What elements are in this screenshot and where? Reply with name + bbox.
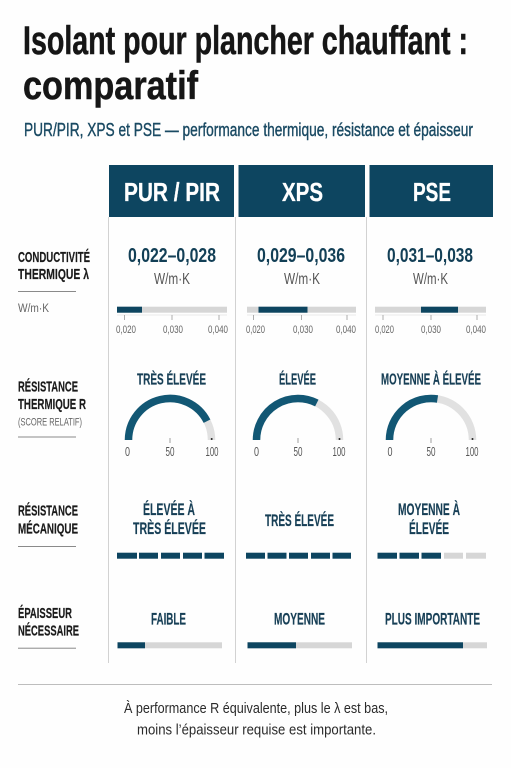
PUR/PIR gauge: 50 <box>166 445 175 459</box>
XPS gauge: 50 <box>294 445 303 459</box>
PSE gauge: 0 <box>388 445 393 459</box>
PSE gauge: 50 <box>426 445 436 459</box>
XPS gauge: 100 <box>332 445 346 459</box>
header: XPS <box>238 165 365 217</box>
row label: résistance mécanique: RÉSISTANCE <box>18 503 78 520</box>
PUR/PIR thermal resistance rating: TRÈS ÉLEVÉE <box>137 369 206 388</box>
PUR/PIR conductivity range bar: 0,020 <box>116 324 136 336</box>
header: XPS: XPS <box>282 177 323 207</box>
PUR/PIR gauge: 0 <box>125 445 130 459</box>
PUR/PIR conductivity range bar: 0,040 <box>208 324 228 336</box>
XPS gauge: 0 <box>254 445 259 459</box>
row label: résistance mécanique: MÉCANIQUE <box>18 520 78 537</box>
XPS conductivity range bar: 0,030 <box>293 324 313 336</box>
PUR/PIR thickness rating: FAIBLE <box>151 609 186 628</box>
row label: épaisseur nécessaire: NÉCESSAIRE <box>18 623 79 640</box>
PUR/PIR conductivity range bar: 0,030 <box>163 324 183 336</box>
PSE mechanical rating: MOYENNE À <box>398 500 460 519</box>
header: PSE: PSE <box>413 177 451 207</box>
row label: conductivité thermique: THERMIQUE λ <box>18 266 89 283</box>
XPS mechanical rating: TRÈS ÉLEVÉE <box>265 511 334 530</box>
row label: conductivité thermique: W/m·K <box>18 303 49 315</box>
footer note: moins l’épaisseur requise est importante. <box>137 722 376 738</box>
PSE mechanical rating: ÉLEVÉE <box>409 519 449 538</box>
row label: résistance mécanique <box>18 503 78 547</box>
row label: épaisseur nécessaire <box>18 605 79 649</box>
PSE mechanical segments <box>378 553 486 559</box>
header: PUR / PIR <box>109 165 234 217</box>
PSE conductivity value <box>387 244 473 288</box>
PUR/PIR thickness bar <box>118 642 222 648</box>
XPS conductivity range bar <box>246 307 356 336</box>
PSE conductivity value: W/m·K <box>413 271 448 288</box>
row label: résistance thermique: THERMIQUE R <box>18 396 86 413</box>
XPS mechanical segments <box>246 553 351 559</box>
PSE gauge: 100 <box>466 445 479 459</box>
PUR/PIR conductivity value: W/m·K <box>154 271 190 288</box>
PUR/PIR mechanical rating: TRÈS ÉLEVÉE <box>133 519 206 538</box>
PSE conductivity range bar: 0,030 <box>421 324 441 336</box>
row label: résistance thermique: (SCORE RELATIF) <box>18 417 82 429</box>
PUR/PIR conductivity value <box>128 244 216 288</box>
row label: conductivité thermique: CONDUCTIVITÉ <box>18 249 90 266</box>
footer note: À performance R équivalente, plus le λ est bas, <box>124 700 388 717</box>
PUR/PIR mechanical rating: ÉLEVÉE À <box>143 500 195 519</box>
PSE mechanical rating <box>398 500 460 538</box>
PUR/PIR mechanical rating <box>133 500 206 538</box>
row label: résistance thermique: RÉSISTANCE <box>18 379 78 396</box>
header: PSE <box>370 165 493 217</box>
XPS conductivity value: W/m·K <box>284 271 320 288</box>
PUR/PIR conductivity value: 0,022–0,028 <box>128 244 216 267</box>
PUR/PIR mechanical segments <box>117 553 224 559</box>
header: PUR / PIR: PUR / PIR <box>124 177 220 207</box>
row label: résistance thermique <box>18 379 86 438</box>
title <box>23 19 468 108</box>
PSE gauge <box>388 398 479 459</box>
PUR/PIR gauge <box>125 398 219 459</box>
XPS conductivity range bar: 0,040 <box>336 324 356 336</box>
PSE conductivity range bar: 0,040 <box>466 324 486 336</box>
XPS thickness rating: MOYENNE <box>274 609 325 628</box>
PSE conductivity range bar <box>375 307 486 336</box>
column separators <box>108 217 366 663</box>
XPS conductivity range bar: 0,020 <box>246 324 265 336</box>
PSE conductivity range bar: 0,020 <box>375 324 394 336</box>
XPS thermal resistance rating: ÉLEVÉE <box>279 369 316 388</box>
PUR/PIR conductivity range bar <box>116 307 228 336</box>
XPS conductivity value: 0,029–0,036 <box>257 244 345 267</box>
PSE conductivity value: 0,031–0,038 <box>387 244 473 267</box>
PSE thickness bar <box>378 642 487 648</box>
PUR/PIR gauge: 100 <box>206 445 219 459</box>
XPS gauge <box>254 398 346 459</box>
XPS thickness bar <box>248 642 352 648</box>
row label: conductivité thermique <box>18 249 90 315</box>
footer note <box>124 700 388 738</box>
row label: épaisseur nécessaire: ÉPAISSEUR <box>18 605 72 622</box>
title: comparatif <box>23 64 199 108</box>
XPS conductivity value <box>257 244 345 288</box>
